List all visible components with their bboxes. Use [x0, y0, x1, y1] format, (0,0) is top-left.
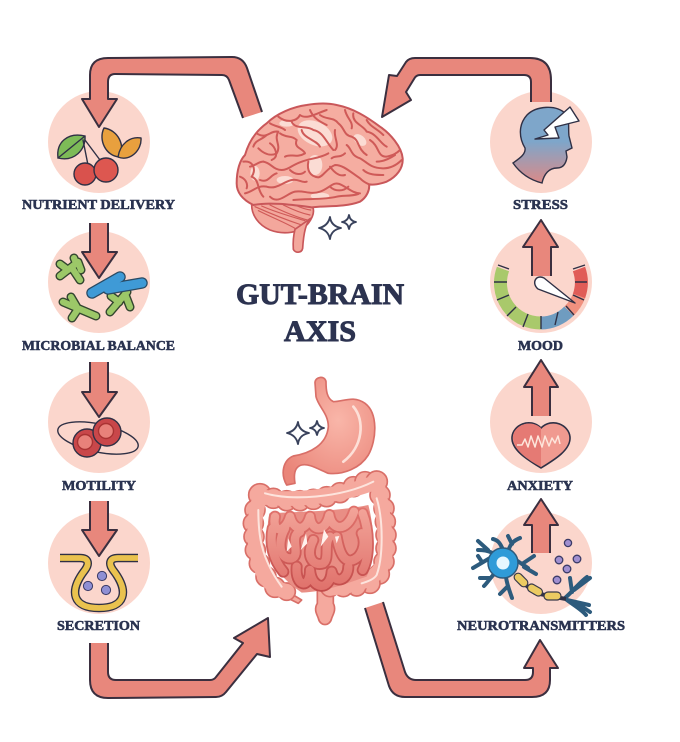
appendix: [282, 590, 302, 603]
panel: anxiety: [490, 371, 592, 493]
arrow: nutrient delivery to microbial balance: [82, 223, 117, 278]
light highlights: [250, 115, 369, 199]
colon body: [255, 482, 385, 592]
colon bumps: [243, 471, 396, 600]
panel: motility: [48, 371, 150, 493]
panel: secretion: [48, 512, 150, 633]
icon: vesicles: [83, 571, 111, 595]
icon: gauge arc: [500, 269, 581, 323]
icon: leaf: [58, 135, 85, 159]
label: NUTRIENT DELIVERY: [22, 197, 175, 212]
icon: almonds: [102, 128, 141, 158]
icon: intestines: [243, 377, 396, 625]
icon: pulse line: [517, 436, 560, 447]
sulci: [240, 110, 402, 200]
arrow: neurotransmitters to anxiety: [524, 499, 558, 553]
icon: gauge needle: [535, 277, 575, 303]
icon: blue bacteria: [92, 277, 142, 293]
icon: neurotransmitter dots: [553, 539, 581, 584]
icon: orbit and blood cells: [55, 416, 141, 460]
label: MOOD: [518, 338, 563, 353]
cerebrum: [237, 103, 403, 207]
arrow: motility to secretion: [82, 501, 117, 556]
title: AXIS: [284, 315, 356, 348]
arrow: brain to nutrient delivery: [82, 57, 262, 127]
icon: neuron: [473, 536, 590, 615]
label: SECRETION: [57, 618, 140, 633]
rectum: [316, 590, 335, 625]
title: [236, 278, 404, 348]
arrow: stress to brain: [382, 58, 551, 117]
label: ANXIETY: [507, 478, 573, 493]
panel: neurotransmitters: [457, 512, 625, 633]
title: GUT-BRAIN: [236, 278, 404, 311]
panel: nutrient delivery: [22, 91, 175, 212]
icon: lightning bolt: [535, 107, 579, 139]
icon: secretory pocket: [60, 558, 138, 608]
icon: heart: [512, 423, 570, 468]
panel: microbial balance: [22, 231, 175, 353]
icon: head silhouette: [513, 107, 572, 183]
colon highlight: [258, 482, 382, 587]
arrow: gut to neurotransmitters: [365, 602, 558, 697]
icon: gut sparkles: [287, 421, 324, 444]
arrow: secretion to gut: [90, 618, 270, 698]
icon: green bacteria: [60, 258, 130, 318]
cerebellum: [252, 202, 313, 233]
small intestine: [268, 505, 373, 593]
arrow: microbial balance to motility: [82, 362, 117, 417]
label: STRESS: [513, 197, 568, 212]
label: NEUROTRANSMITTERS: [457, 618, 625, 633]
label: MICROBIAL BALANCE: [22, 338, 175, 353]
gauge ticks: [494, 265, 587, 329]
icon: brain: [237, 103, 403, 252]
stomach: [283, 377, 375, 485]
panel: stress: [490, 91, 592, 212]
label: MOTILITY: [62, 478, 136, 493]
arrow: mood to stress: [523, 220, 558, 276]
icon: brain sparkles: [319, 215, 356, 239]
brain stem: [293, 218, 311, 252]
panel: mood: [490, 231, 592, 353]
arrow: anxiety to mood: [524, 360, 558, 416]
icon: cherries: [74, 140, 118, 185]
